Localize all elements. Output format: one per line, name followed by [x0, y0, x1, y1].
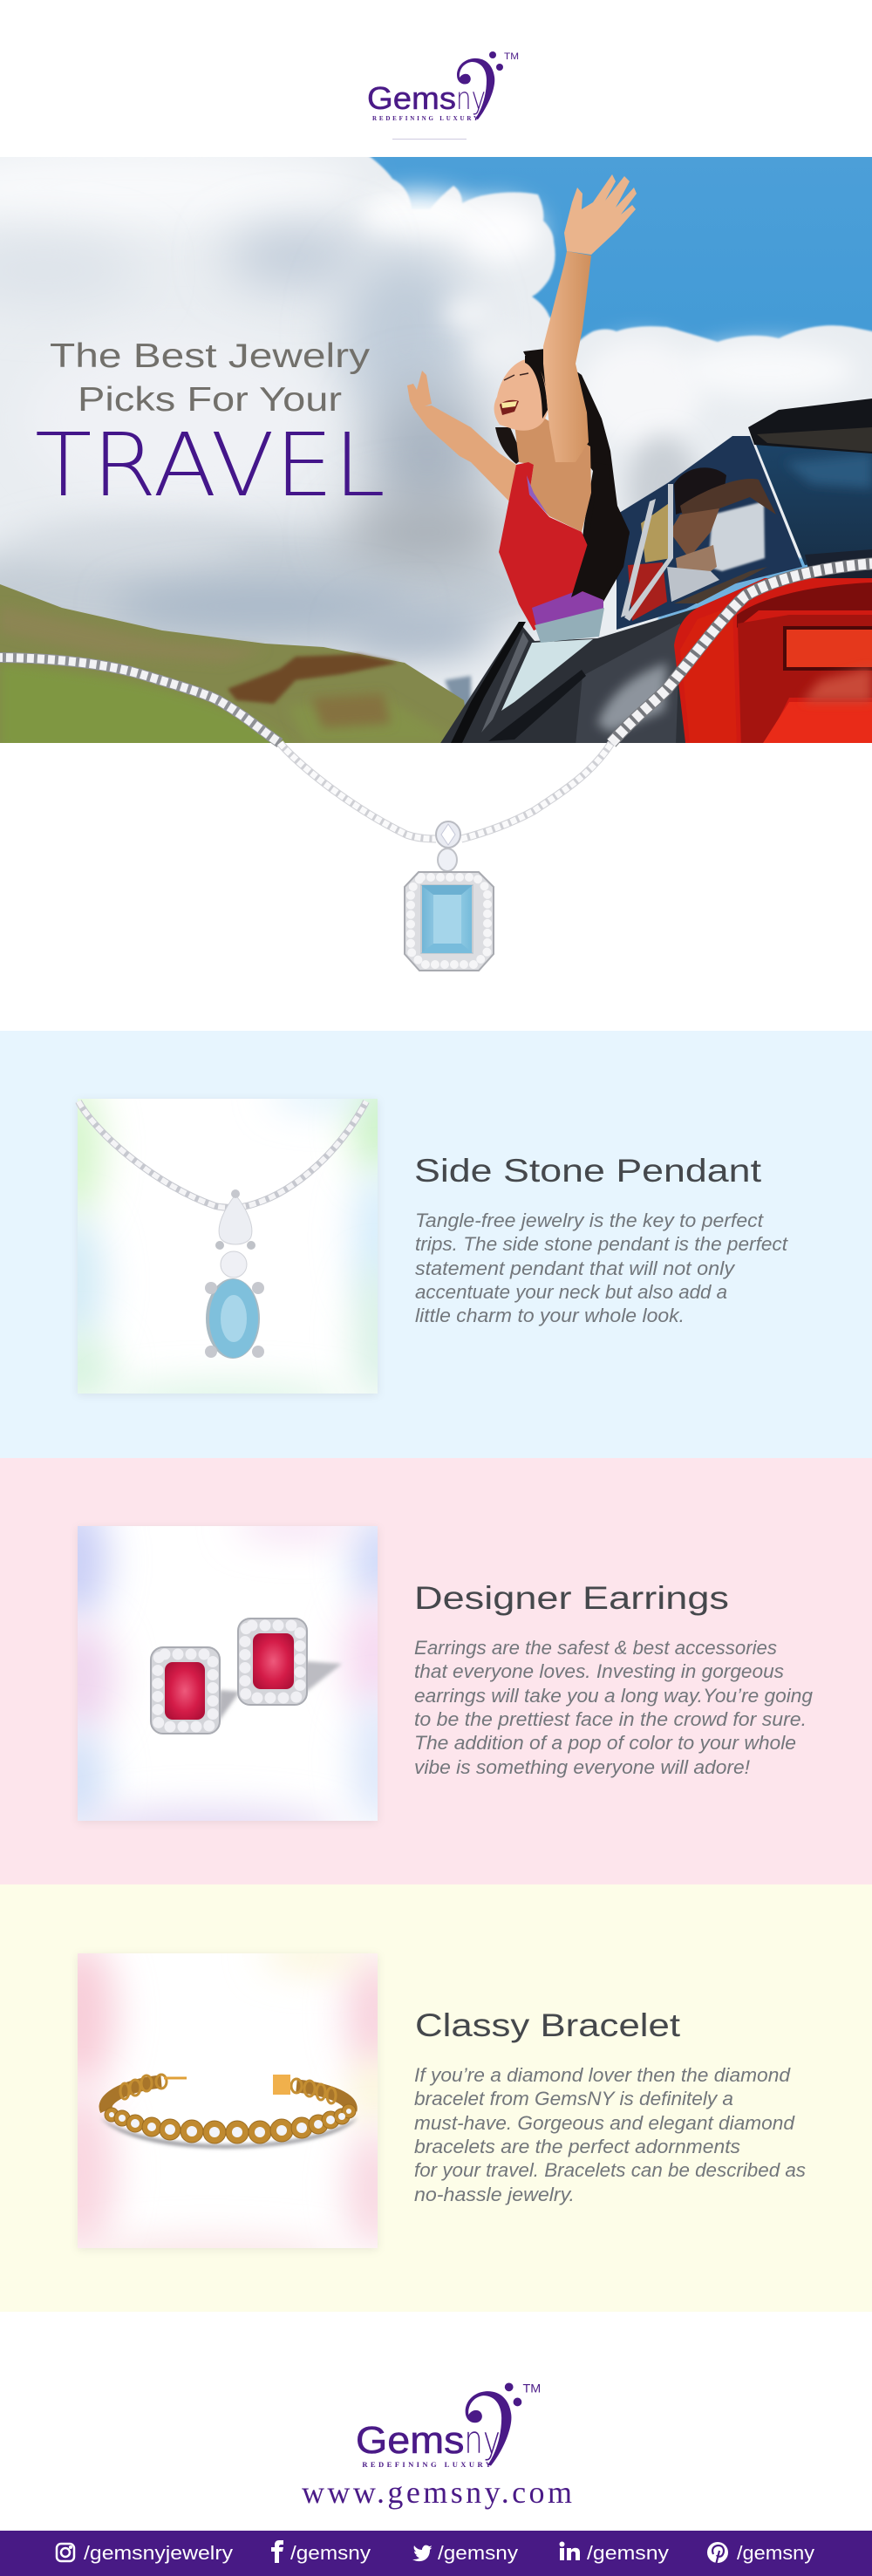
- description: earrings will take you a long way.You’re going: [414, 1685, 814, 1707]
- footer logo: TM: [523, 2382, 541, 2395]
- right earring: [238, 1619, 307, 1705]
- left arm: [412, 405, 519, 501]
- icon: pinterest: [707, 2542, 728, 2565]
- car: [436, 399, 872, 750]
- hair behind: [523, 349, 630, 602]
- icon: instagram: [57, 2544, 74, 2561]
- section: side stone pendant: [0, 1031, 872, 1458]
- description: The addition of a pop of color to your whole: [414, 1732, 796, 1754]
- section: classy bracelet: [0, 1884, 872, 2312]
- header logo: [367, 51, 519, 140]
- description: bracelet from GemsNY is definitely a: [414, 2088, 733, 2109]
- description: [414, 2064, 806, 2205]
- product card: pendant: [44, 1073, 405, 1414]
- heading: Side Stone Pendant: [414, 1153, 762, 1189]
- hero heading: The Best Jewelry: [50, 337, 371, 375]
- description: that everyone loves. Investing in gorgeous: [414, 1660, 784, 1682]
- hero heading: TRAVEL: [35, 414, 385, 516]
- product card: earrings: [45, 1500, 405, 1849]
- pendant chain: [78, 1101, 366, 1208]
- description: statement pendant that will not only: [415, 1257, 736, 1279]
- description: no-hassle jewelry.: [414, 2184, 575, 2205]
- description: Tangle-free jewelry is the key to perfect: [415, 1210, 764, 1231]
- linkedin handle: /gemsny: [587, 2542, 669, 2564]
- social footer bar: [0, 2531, 872, 2576]
- twitter handle: /gemsny: [438, 2542, 518, 2564]
- description: vibe is something everyone will adore!: [414, 1756, 750, 1778]
- bracelet: [100, 2075, 358, 2148]
- hero heading: [35, 337, 385, 516]
- description: accentuate your neck but also add a: [415, 1281, 727, 1303]
- description: must-have. Gorgeous and elegant diamond: [414, 2112, 795, 2134]
- instagram handle: /gemsnyjewelry: [84, 2542, 233, 2564]
- hero heading: Picks For Your: [78, 381, 342, 419]
- logo wordmark: [367, 51, 519, 122]
- pinterest handle: /gemsny: [737, 2542, 814, 2564]
- window silver frame: [621, 484, 673, 621]
- description: Earrings are the safest & best accessories: [414, 1637, 777, 1659]
- description: for your travel. Bracelets can be described as: [414, 2159, 806, 2181]
- description: If you’re a diamond lover then the diamond: [414, 2064, 791, 2086]
- car lower body: [440, 578, 765, 743]
- logo wordmark: ny: [456, 81, 486, 117]
- description: [415, 1210, 788, 1326]
- description: to be the prettiest face in the crowd for sure.: [414, 1708, 807, 1730]
- hero pendant: [405, 821, 494, 971]
- roof and spoiler: [748, 399, 872, 453]
- skirt: [532, 590, 603, 626]
- earring shadows: [218, 1690, 240, 1722]
- rear quarter window: [617, 436, 802, 630]
- icon: facebook: [271, 2540, 283, 2563]
- description: trips. The side stone pendant is the perfect: [415, 1233, 788, 1255]
- hair over the top: [571, 462, 630, 600]
- logo wordmark: REDEFINING LUXURY: [372, 115, 478, 122]
- hero photo: [0, 148, 872, 750]
- clouds: [0, 148, 872, 750]
- icon: twitter: [412, 2545, 433, 2561]
- footer logo: ny: [464, 2418, 501, 2463]
- neck and chest: [514, 419, 591, 532]
- website url: www.gemsny.com: [302, 2475, 572, 2510]
- description: bracelets are the perfect adornments: [414, 2136, 740, 2157]
- section: designer earrings: [0, 1458, 872, 1884]
- product card: bracelet: [45, 1940, 403, 2276]
- face: [494, 359, 548, 431]
- left earring: [151, 1647, 220, 1734]
- description: [414, 1637, 814, 1778]
- raised arm: [543, 251, 591, 462]
- description: little charm to your whole look.: [415, 1305, 685, 1326]
- footer logo: [356, 2382, 541, 2469]
- black door pillar: [451, 622, 526, 743]
- tail light: [674, 578, 872, 750]
- pendant stones: [205, 1189, 264, 1359]
- heading: Classy Bracelet: [415, 2007, 681, 2043]
- footer logo: Gems: [356, 2419, 464, 2462]
- red top: [499, 462, 588, 630]
- hillside: [0, 584, 471, 750]
- rear glass: [754, 440, 872, 565]
- logo wordmark: TM: [504, 51, 519, 62]
- woman: [407, 174, 637, 643]
- necklace chain: [0, 563, 872, 839]
- footer logo: REDEFINING LUXURY: [362, 2460, 491, 2469]
- logo wordmark: Gems: [367, 80, 456, 116]
- facebook handle: /gemsny: [290, 2542, 371, 2564]
- heading: Designer Earrings: [414, 1580, 729, 1616]
- icon: linkedin: [560, 2541, 580, 2560]
